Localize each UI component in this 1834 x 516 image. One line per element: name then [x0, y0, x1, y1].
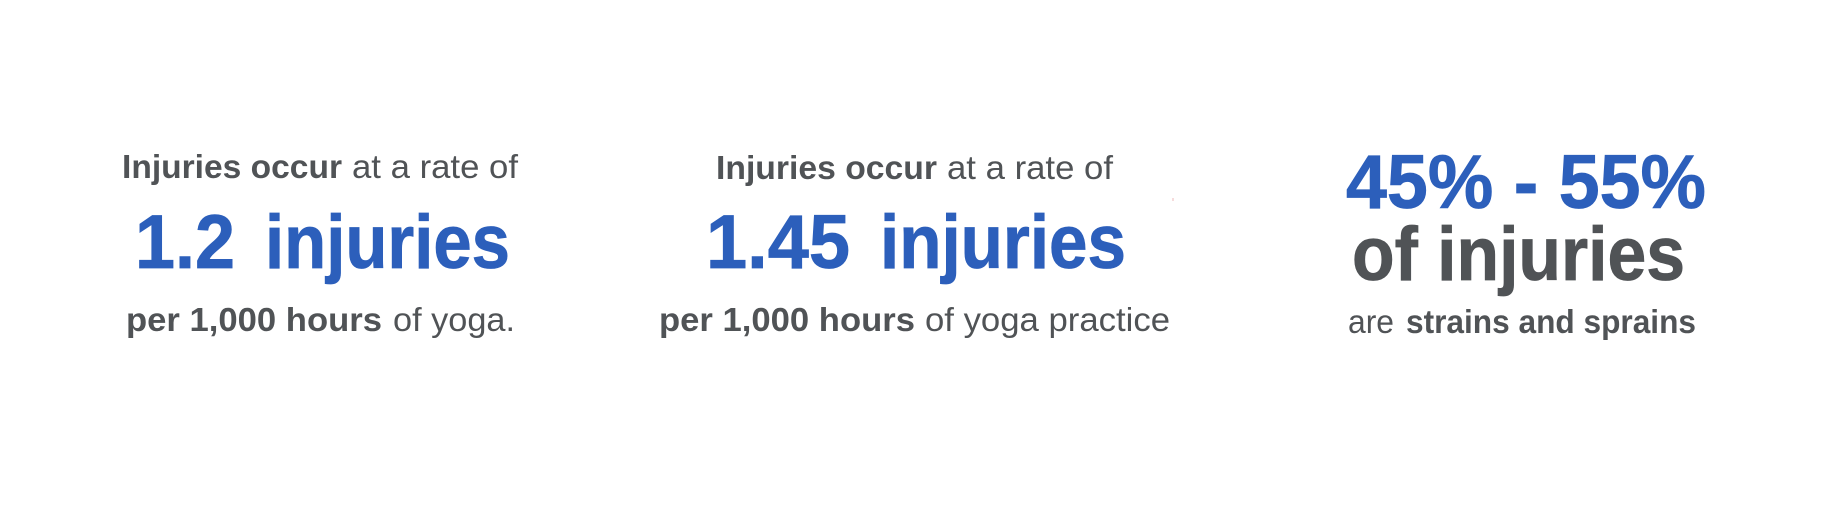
text: per 1,000 hours of yoga practice	[659, 301, 1170, 338]
text: are strains and sprains: are	[1348, 303, 1394, 340]
panel: 1.2 injuries	[122, 148, 519, 338]
text: injuries occur at a rate of: at a rate of	[352, 148, 519, 185]
text: injuries occur at a rate of	[122, 148, 519, 185]
text: are strains and sprains: strains and sprains	[1406, 303, 1696, 340]
text: injuries occur at a rate of: Injuries occur	[716, 149, 937, 186]
text: injuries occur at a rate of: at a rate of	[947, 149, 1114, 186]
panel: 45% - 55% of injuries	[1346, 140, 1706, 340]
panel: 1.45 injuries	[659, 149, 1170, 338]
text: per 1,000 hours of yoga	[126, 301, 515, 338]
stat: 1.2 injuries	[135, 200, 510, 285]
stat: 45% - 55%: 45% - 55%	[1346, 140, 1706, 225]
text: injuries occur at a rate of: Injuries occur	[122, 148, 342, 185]
stat: of injuries: of injuries	[1352, 212, 1685, 297]
text: injuries occur at a rate of	[716, 149, 1114, 186]
stat: 1.2 injuries: injuries	[265, 200, 510, 285]
stat: 1.45 injuries	[706, 200, 1126, 285]
text: per 1,000 hours of yoga: of yoga.	[393, 301, 515, 338]
text: per 1,000 hours of yoga practice: per 1,000 hours	[659, 301, 915, 338]
text: per 1,000 hours of yoga practice: of yoga practice	[925, 301, 1170, 338]
stat: 1.2 injuries: 1.2	[135, 200, 235, 285]
stat: 1.45 injuries: injuries	[880, 200, 1126, 285]
stat: 1.45 injuries: 1.45	[706, 200, 850, 285]
text: per 1,000 hours of yoga: per 1,000 hours	[126, 301, 382, 338]
